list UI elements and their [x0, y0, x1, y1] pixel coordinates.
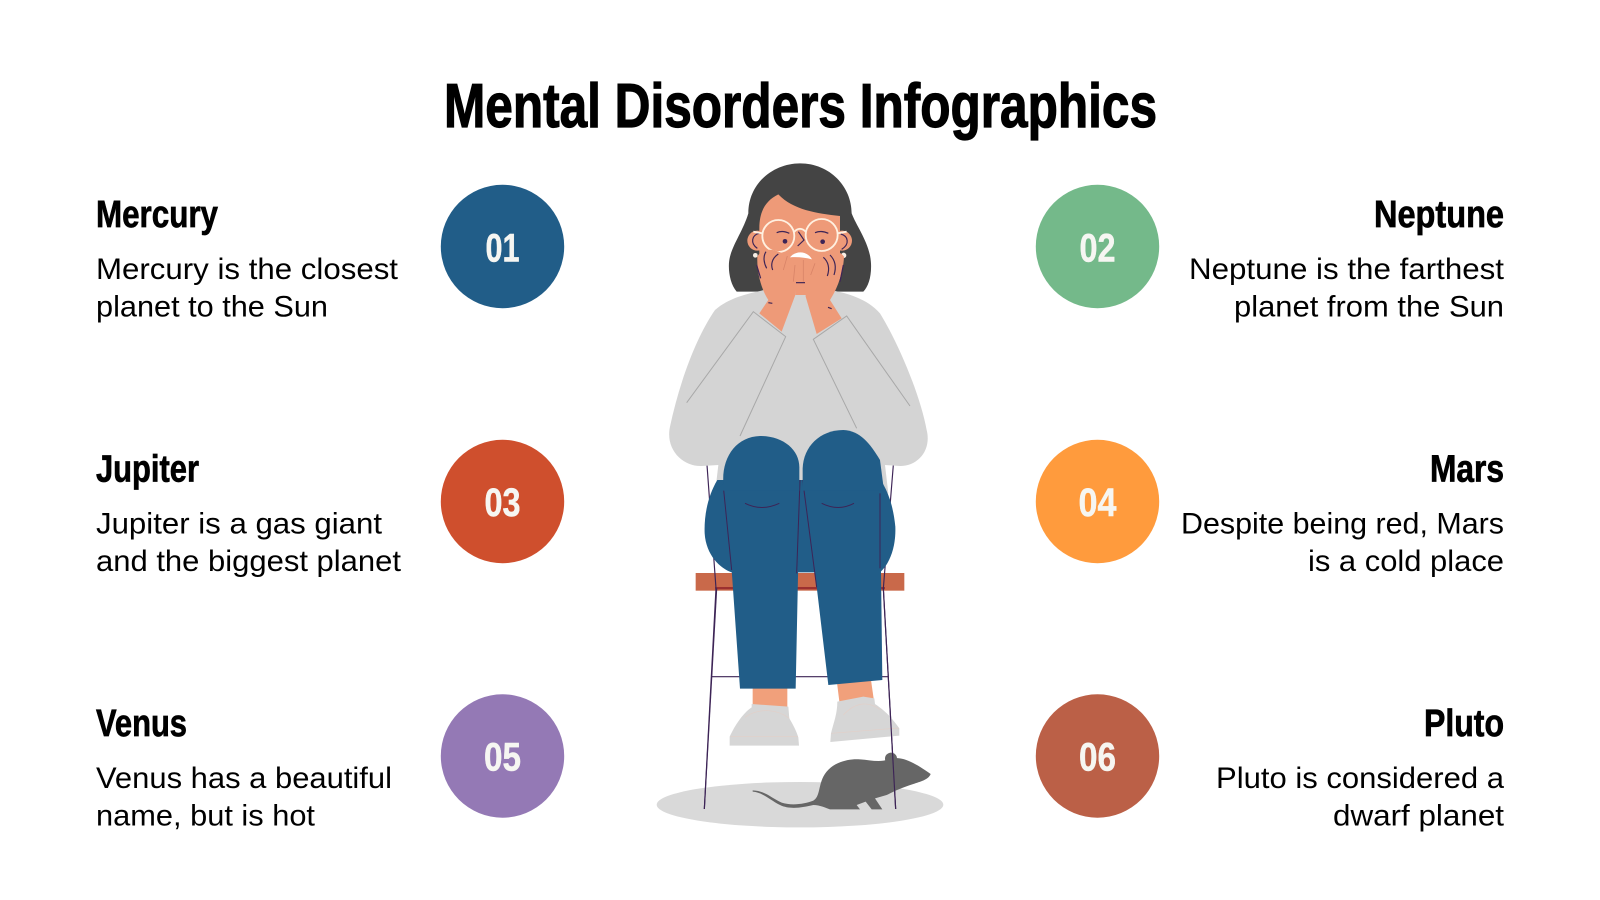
panel: Mercury [96, 185, 564, 324]
heading: Neptune: Neptune [1374, 194, 1504, 236]
text: Mercury description: planet to the Sun [96, 290, 328, 324]
woman: seated thighs [705, 480, 895, 572]
text: Mars description [1181, 508, 1504, 578]
badge 05 [441, 694, 564, 818]
heading: Mars: Mars [1430, 448, 1504, 490]
panel: Venus [96, 694, 564, 832]
text: Neptune description: planet from the Sun [1234, 290, 1504, 324]
text: Jupiter description: Jupiter is a gas giant [96, 508, 383, 540]
badge 03 [441, 440, 564, 563]
woman: ankles [753, 680, 874, 710]
badge 02: 02 [1080, 226, 1116, 270]
woman: hair [729, 163, 871, 292]
text: Pluto description: Pluto is considered a [1216, 762, 1504, 795]
badge 06: 06 [1079, 736, 1116, 780]
woman: face and hands [747, 194, 852, 334]
text: Mars description: Despite being red, Mars [1181, 508, 1504, 540]
title: Mental Disorders Infographics [444, 72, 1157, 141]
text: Venus description [96, 762, 392, 832]
text: Mercury description [96, 253, 399, 324]
badge 01 [441, 185, 564, 308]
badge 04 [1036, 440, 1159, 563]
text: Mars description: is a cold place [1308, 545, 1504, 578]
woman: shoes [730, 697, 899, 746]
heading: Mercury: Mercury [96, 194, 218, 236]
chair front legs over shadow [704, 588, 896, 809]
panel: Jupiter [96, 440, 564, 578]
badge 02 [1036, 185, 1159, 308]
text: Jupiter description [96, 508, 402, 578]
text: Pluto description [1216, 762, 1505, 832]
text: Mercury description: Mercury is the closest [96, 253, 399, 286]
woman: sweater folds [687, 312, 910, 436]
heading: Pluto: Pluto [1424, 703, 1504, 745]
chair back legs and seat [696, 465, 904, 809]
badge 04: 04 [1078, 481, 1117, 525]
badge 06 [1036, 694, 1159, 818]
panel: Neptune [1036, 185, 1505, 324]
panel: Pluto [1036, 694, 1505, 832]
text: Venus description: name, but is hot [96, 800, 316, 832]
woman: sweater [669, 289, 928, 493]
badge 01: 01 [486, 226, 520, 270]
text: Venus description: Venus has a beautiful [96, 762, 392, 795]
text: Neptune description [1189, 253, 1505, 324]
text: Pluto description: dwarf planet [1333, 800, 1505, 832]
badge 05: 05 [484, 736, 521, 780]
heading: Venus: Venus [96, 703, 187, 745]
mouse [753, 753, 931, 809]
text: Neptune description: Neptune is the farthest [1189, 253, 1505, 286]
woman: trouser legs [723, 480, 882, 689]
text: Jupiter description: and the biggest planet [96, 545, 402, 578]
panel: Mars [1036, 440, 1504, 578]
badge 03: 03 [484, 481, 520, 525]
floor shadow [657, 782, 943, 827]
heading: Jupiter: Jupiter [96, 448, 199, 490]
illustration: anxious woman on chair with mouse [657, 163, 943, 827]
woman: knees [717, 430, 884, 491]
